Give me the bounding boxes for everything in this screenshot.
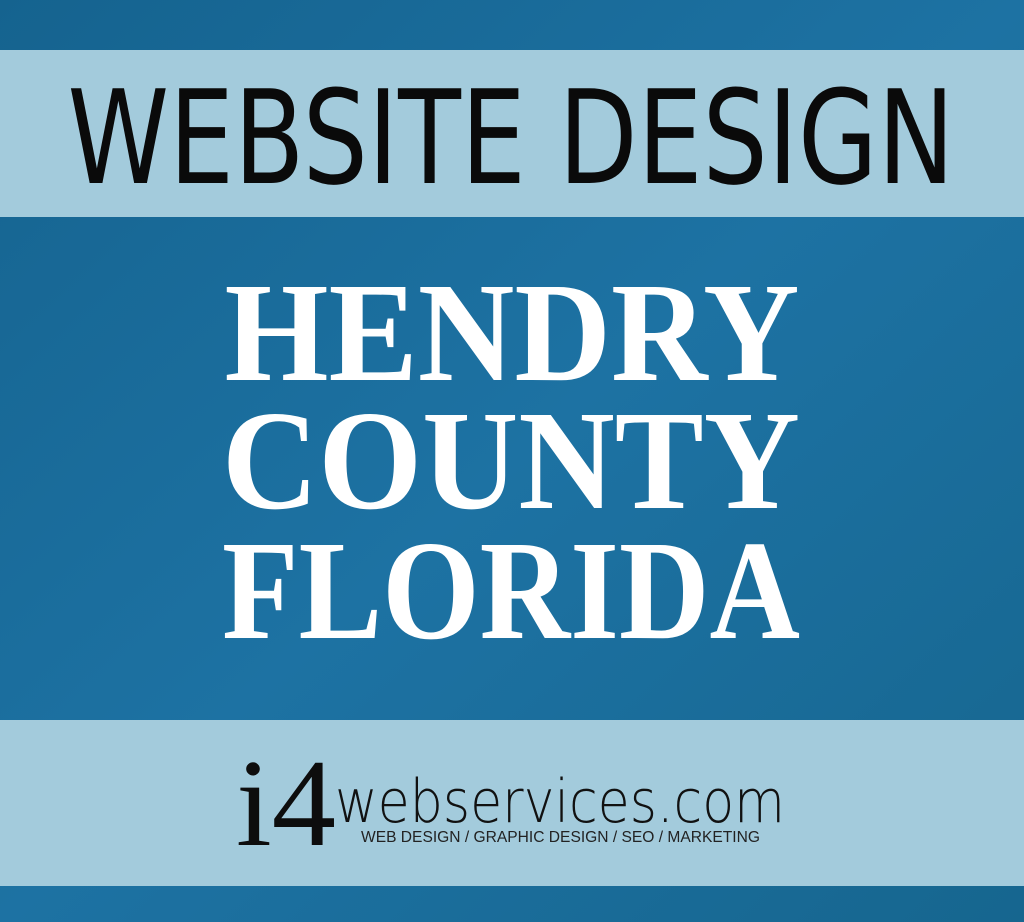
logo bbox=[236, 735, 785, 873]
heading: hendry county florida: HENDRY bbox=[224, 253, 800, 411]
heading: hendry county florida: FLORIDA bbox=[222, 511, 800, 669]
logo wordmark: webservices.com bbox=[335, 767, 785, 837]
logo mark i4: i4 bbox=[236, 735, 336, 873]
heading: hendry county florida bbox=[222, 253, 800, 669]
tagline: WEB DESIGN / GRAPHIC DESIGN / SEO / MARKETING bbox=[361, 829, 760, 846]
bottom band bbox=[0, 720, 1024, 886]
heading: hendry county florida: COUNTY bbox=[222, 381, 800, 539]
top band bbox=[0, 50, 1024, 217]
